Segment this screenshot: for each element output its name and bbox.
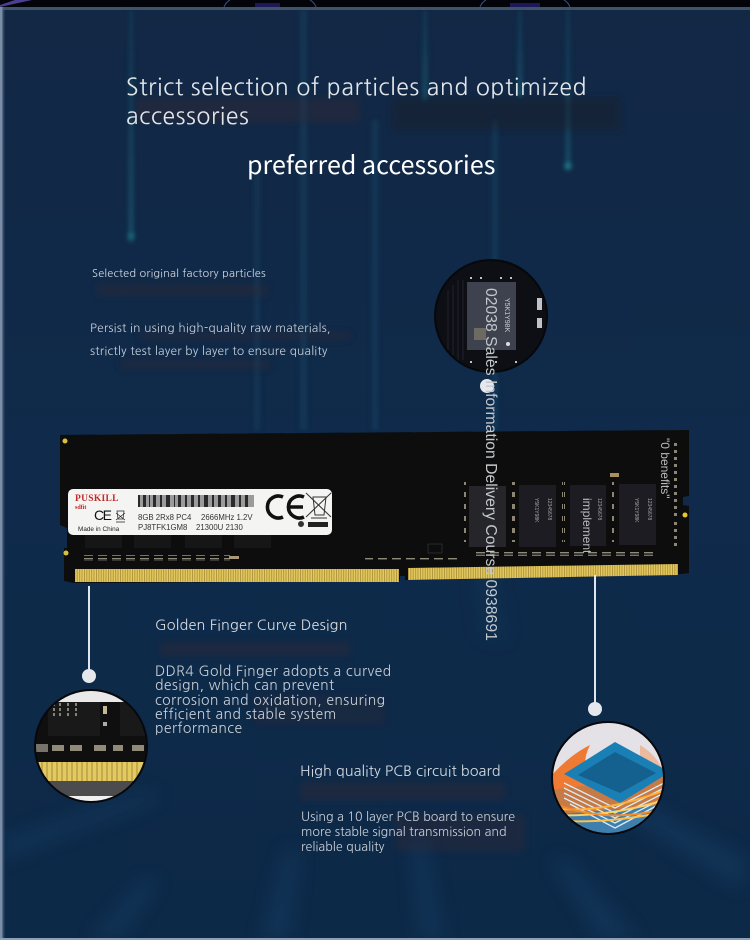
gold finger close-up icon xyxy=(34,689,148,803)
label: sdfit xyxy=(75,505,86,511)
text: golden finger: design, which can prevent xyxy=(155,679,334,693)
overlay vertical text: benefits: "0 benefits" xyxy=(658,438,672,499)
text: factory particles xyxy=(90,322,331,357)
text: golden finger: corrosion and oxidation, ensuring xyxy=(155,694,386,708)
subtitle: preferred accessories xyxy=(247,146,496,182)
text: factory particles: strictly test layer by layer to ensure quality xyxy=(90,345,328,357)
label: 2666MHz 1.2V xyxy=(201,513,253,522)
connector: PCB xyxy=(594,575,596,707)
text: PCB: more stable signal transmission and xyxy=(301,825,507,838)
title xyxy=(126,76,587,128)
overlay vertical text: implement: implement xyxy=(580,498,594,553)
label: Made in China xyxy=(78,526,120,533)
text: golden finger: DDR4 Gold Finger adopts a curved xyxy=(155,665,392,679)
heading: golden finger: Golden Finger Curve Design xyxy=(155,619,348,633)
RAM module: 12345678 xyxy=(546,498,552,520)
top strip xyxy=(0,0,750,7)
chip close-up icon xyxy=(434,259,548,373)
text: PCB: reliable quality xyxy=(301,840,384,853)
RAM module: Y5K1Y98K xyxy=(633,498,639,523)
text: PCB xyxy=(301,810,515,853)
chip close-up icon: Y5K1Y98K xyxy=(503,298,510,333)
text: golden finger xyxy=(155,664,392,736)
connector dot: gold finger xyxy=(82,669,96,683)
label xyxy=(68,489,332,535)
RAM module: 12345678 xyxy=(646,498,652,520)
text: golden finger: performance xyxy=(155,722,242,736)
PCB xyxy=(59,430,689,583)
connector: gold finger xyxy=(88,586,90,676)
RAM module: Y5K1Y98K xyxy=(533,498,539,523)
overlay vertical text: sales: 02038 Sales Information Delivery Course 0938691 xyxy=(482,288,499,641)
heading: factory particles: Selected original factory particles xyxy=(92,268,266,279)
blurred ghost text xyxy=(97,98,620,851)
text: PCB: Using a 10 layer PCB board to ensure xyxy=(301,810,515,823)
label: PUSKILL xyxy=(75,494,119,504)
label: 8GB 2Rx8 PC4 xyxy=(138,513,192,522)
text: factory particles: Persist in using high-quality raw materials, xyxy=(90,322,331,334)
title: Strict selection of particles and optimized xyxy=(126,76,587,99)
text: golden finger: efficient and stable system xyxy=(155,708,337,722)
RAM module xyxy=(60,430,689,583)
PCB layers icon xyxy=(551,721,665,835)
connector dot: chip xyxy=(480,379,494,393)
heading: PCB: High quality PCB circuit board xyxy=(300,765,501,779)
title: accessories xyxy=(126,105,249,128)
perspective floor xyxy=(0,470,750,940)
label: 21300U 2130 xyxy=(196,523,243,532)
label: CE xyxy=(94,507,112,523)
RAM module: 12345678 xyxy=(596,498,602,520)
label: PJ8TFK1GM8 xyxy=(138,523,187,532)
connector dot: PCB xyxy=(588,702,602,716)
